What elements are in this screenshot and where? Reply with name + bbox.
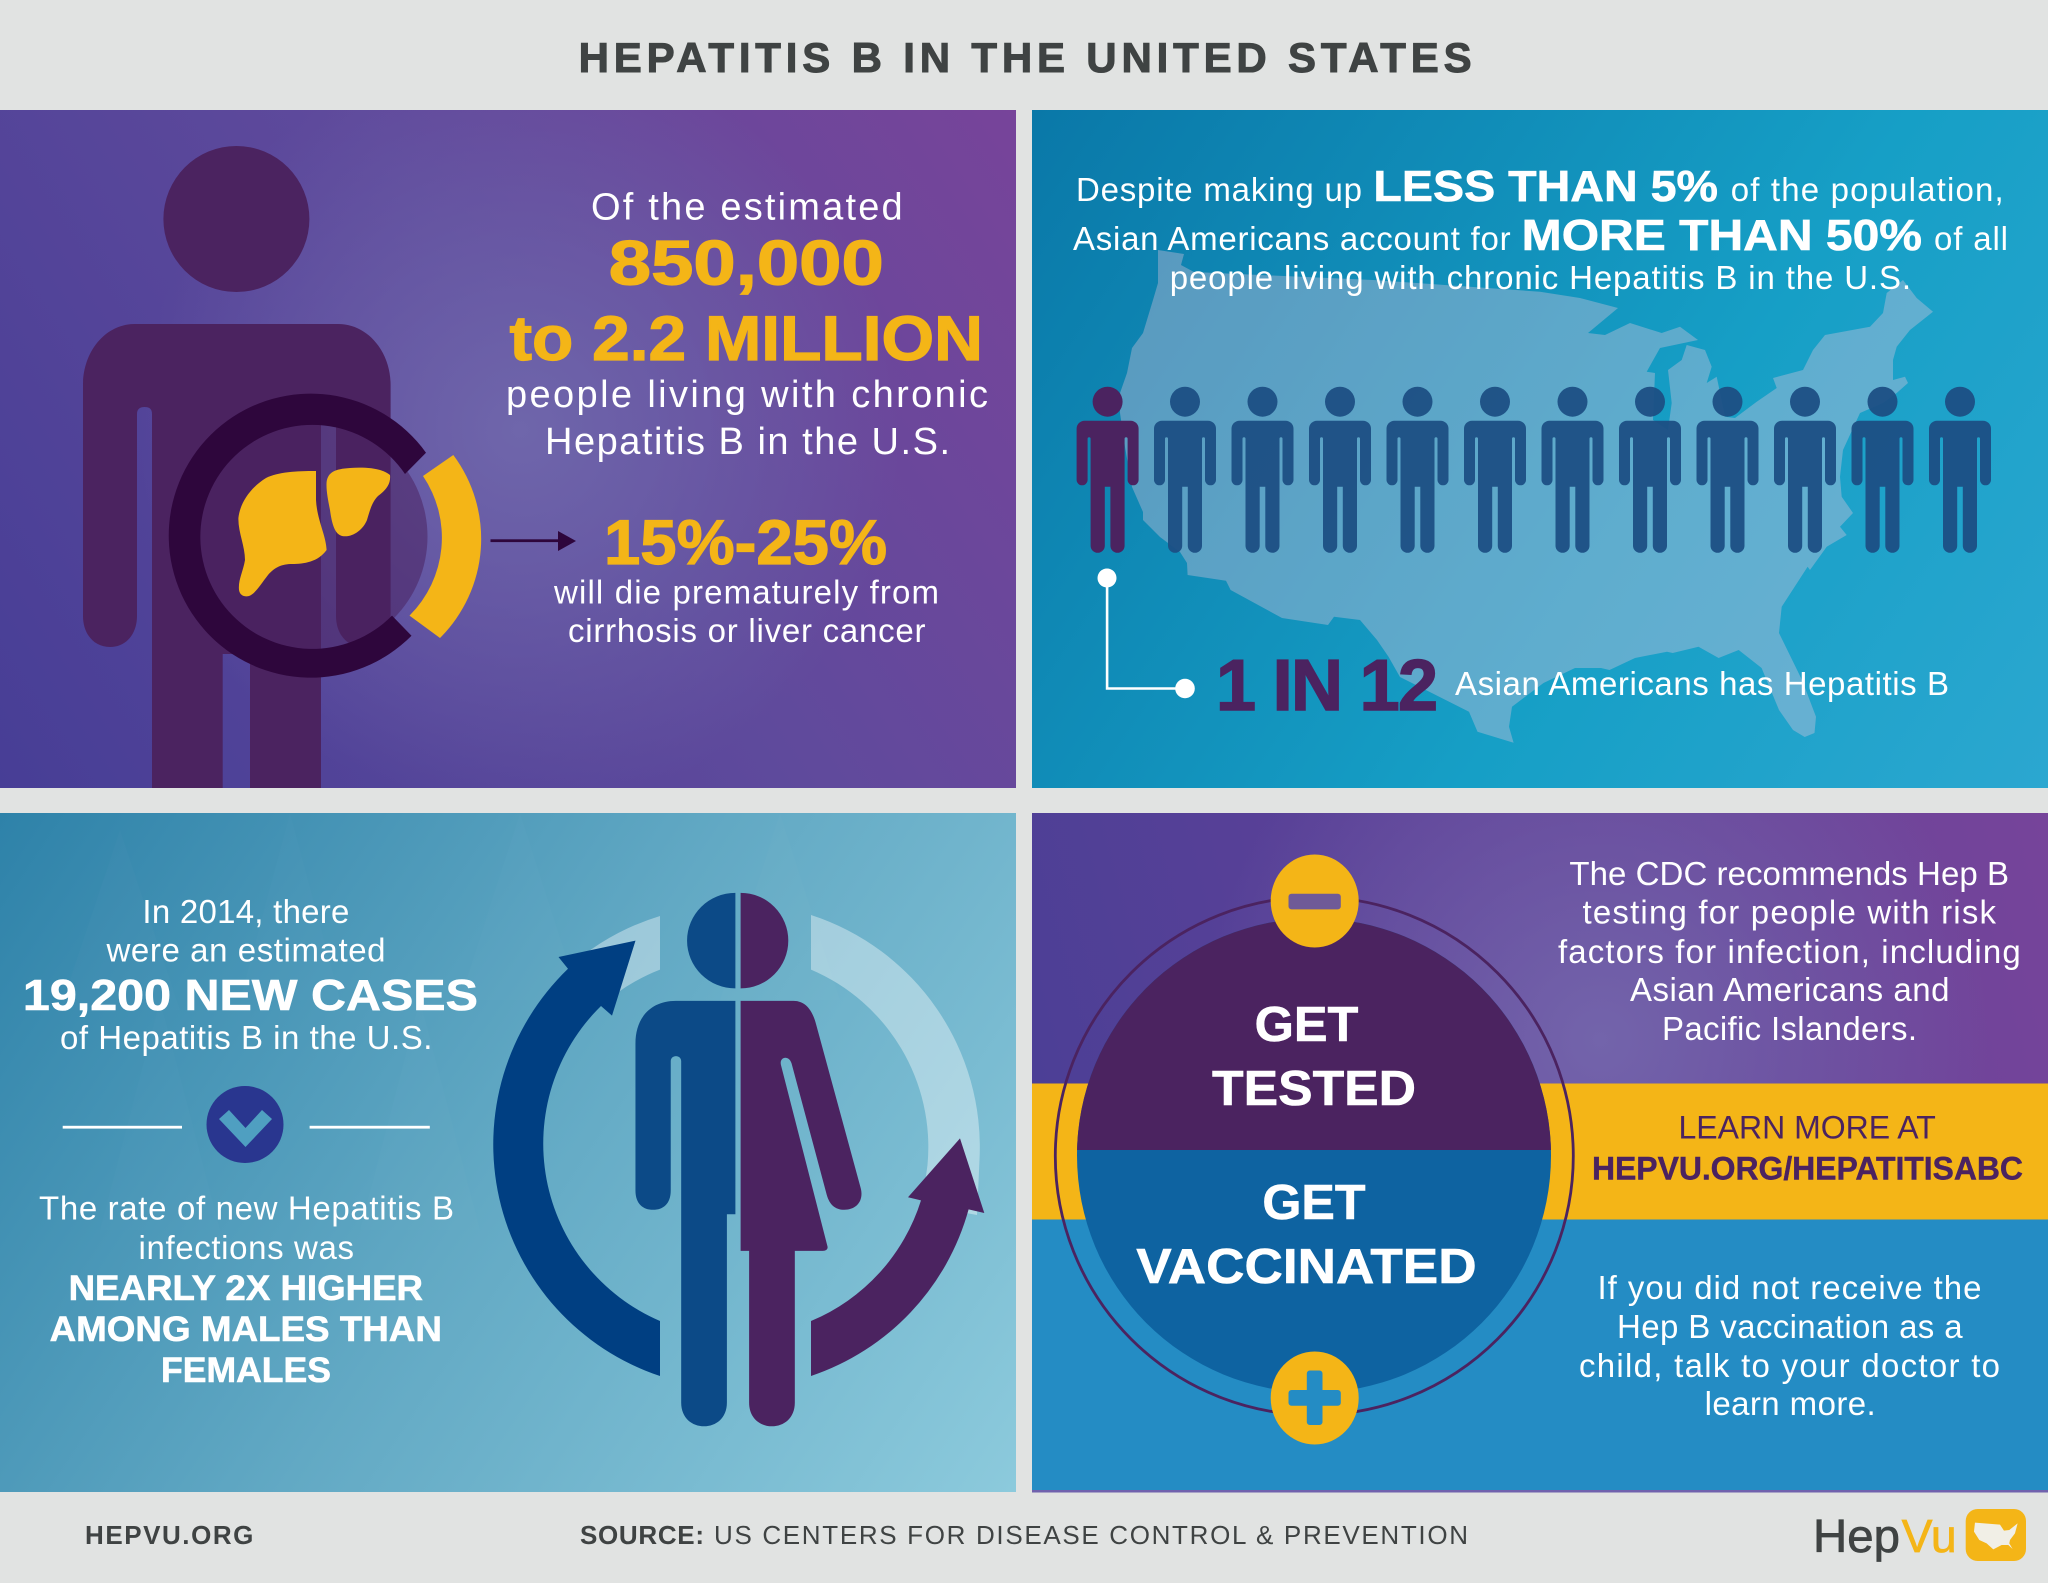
text block: rate among males xyxy=(39,1190,454,1390)
icon: highlighted person xyxy=(1077,387,1139,553)
panel: recommendations xyxy=(1032,813,2048,1492)
text block: CDC recommendation: testing for people with risk xyxy=(1582,894,1996,931)
text block: new cases: 19,200 NEW CASES xyxy=(23,971,478,1020)
text block: learn more: LEARN MORE AT xyxy=(1678,1109,1936,1145)
text block: population share: Asian Americans account for xyxy=(1073,220,1511,257)
text block: premature death rate: cirrhosis or liver cancer xyxy=(568,612,926,649)
text block: estimated people xyxy=(506,187,988,463)
text block: rate among males: NEARLY 2X HIGHER xyxy=(69,1269,423,1308)
text block: population share: LESS THAN 5% xyxy=(1373,162,1718,211)
label: get tested: TESTED xyxy=(1212,1062,1416,1116)
label: get vaccinated: GET xyxy=(1262,1176,1366,1230)
text block: population share: of the population, xyxy=(1731,171,2004,208)
text block: population share: Despite making up xyxy=(1076,171,1362,208)
pictogram: row of twelve people, one highlighted xyxy=(1077,387,1991,553)
text block: population share xyxy=(1073,162,2008,296)
text block: new cases: of Hepatitis B in the U.S. xyxy=(60,1019,432,1056)
text block: CDC recommendation: The CDC recommends Hep B xyxy=(1569,855,2009,892)
logo: HepVu: Hep xyxy=(1813,1510,1900,1562)
text block: population share: MORE THAN 50% xyxy=(1522,211,1922,260)
text block: rate among males: AMONG MALES THAN xyxy=(50,1310,442,1349)
text block: new cases xyxy=(23,893,478,1056)
text block: estimated people: 850,000 xyxy=(609,228,884,298)
callout: 1 in 12: Asian Americans has Hepatitis B xyxy=(1455,665,1949,702)
text block: vaccination advice: Hep B vaccination as a xyxy=(1617,1308,1963,1345)
text block: rate among males: infections was xyxy=(138,1229,354,1266)
icon: liver xyxy=(238,468,390,596)
text block: estimated people: Hepatitis B in the U.S. xyxy=(545,421,950,463)
panel: new cases xyxy=(0,813,1016,1492)
text block: CDC recommendation: factors for infection, including xyxy=(1558,933,2021,970)
text block: CDC recommendation: Asian Americans and xyxy=(1630,971,1950,1008)
icon: other eleven people xyxy=(1154,387,1991,553)
connector from person to callout xyxy=(1098,568,1195,698)
text block: population share: people living with chronic Hepatitis B in the U.S. xyxy=(1170,259,1911,296)
icon: minus xyxy=(1271,854,1359,948)
text block: vaccination advice: learn more. xyxy=(1705,1385,1876,1422)
text block: premature death rate xyxy=(553,508,939,649)
icon: half male half female figure xyxy=(635,893,861,1426)
text block: new cases: were an estimated xyxy=(106,932,386,969)
arrow: male xyxy=(493,941,660,1376)
text block: estimated people: Of the estimated xyxy=(591,187,903,229)
callout: 1 in 12: 1 IN 12 xyxy=(1216,646,1438,726)
chart: circular arrows xyxy=(493,915,984,1376)
text block: learn more xyxy=(1592,1109,2023,1186)
arrow xyxy=(490,531,576,551)
text block: learn more: HEPVU.ORG/HEPATITISABC xyxy=(1592,1150,2023,1186)
logo: HepVu xyxy=(1813,1509,2026,1562)
text block: rate among males: The rate of new Hepatitis B xyxy=(39,1190,454,1227)
text block: vaccination advice: child, talk to your doctor to xyxy=(1579,1347,2000,1384)
text block: estimated people: people living with chronic xyxy=(506,374,988,416)
icon: plus xyxy=(1271,1352,1359,1444)
text block: vaccination advice: If you did not receive the xyxy=(1598,1269,1982,1306)
text block: new cases: In 2014, there xyxy=(142,893,349,930)
panel: Asian Americans xyxy=(1032,110,2048,788)
label: get vaccinated: VACCINATED xyxy=(1136,1240,1477,1294)
label: get tested xyxy=(1212,998,1416,1116)
text block: CDC recommendation: Pacific Islanders. xyxy=(1662,1010,1917,1047)
text block: estimated people: to 2.2 MILLION xyxy=(510,304,983,374)
footer: source: US CENTERS FOR DISEASE CONTROL & PREVENTION xyxy=(714,1520,1468,1550)
text block: rate among males: FEMALES xyxy=(161,1351,331,1390)
text block: premature death rate: will die prematurely from xyxy=(553,574,939,611)
title: HEPATITIS B IN THE UNITED STATES xyxy=(579,34,1472,81)
diagram: get tested and vaccinated circle xyxy=(1055,854,1573,1444)
label: get tested: GET xyxy=(1255,998,1358,1052)
text block: vaccination advice xyxy=(1579,1269,2000,1422)
text block: premature death rate: 15%-25% xyxy=(604,508,887,578)
logo: HepVu: Vu xyxy=(1902,1510,1957,1562)
divider with chevron icon xyxy=(63,1086,430,1163)
arrow: female xyxy=(811,1138,984,1376)
label: get vaccinated xyxy=(1136,1176,1477,1294)
text block: CDC recommendation xyxy=(1558,855,2021,1047)
footer: website: HEPVU.ORG xyxy=(85,1520,253,1550)
callout: 1 in 12 xyxy=(1216,646,1949,726)
panel: people living with hepatitis B xyxy=(0,110,1016,788)
icon: magnifier ring around liver xyxy=(169,394,481,678)
text block: population share: of all xyxy=(1934,220,2008,257)
map: United States silhouette xyxy=(1120,250,1933,743)
icon: human body silhouette xyxy=(83,146,391,788)
footer: source: SOURCE: xyxy=(580,1520,704,1550)
